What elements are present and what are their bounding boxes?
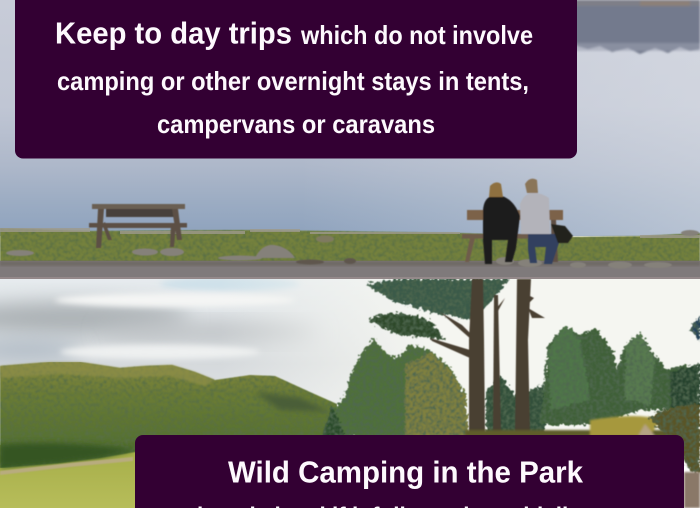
photo: hills and pine forest <box>0 277 700 508</box>
far shore reflection <box>574 0 700 54</box>
man in grey <box>520 193 550 234</box>
shoreline rocks <box>6 230 699 268</box>
backpack <box>551 224 573 243</box>
heading text: keep to day trips: Keep to day trips <box>55 16 292 50</box>
gravel path <box>0 261 700 277</box>
heading text: wild camping in the park: Wild Camping in the Park <box>228 454 584 490</box>
picnic bench: left <box>89 204 187 248</box>
woman in black <box>483 194 520 264</box>
picnic bench: right with two seated people <box>462 179 573 264</box>
hills with forest <box>0 362 337 468</box>
panel: day trips message <box>15 0 577 158</box>
undergrowth and footpath <box>465 416 700 440</box>
shrub and gravel path at right edge <box>648 405 700 508</box>
dirt track across field <box>0 457 133 475</box>
loch water <box>0 0 700 236</box>
body text: line three: campervans or caravans <box>157 109 435 139</box>
field <box>0 445 135 508</box>
body text: line two: camping or other overnight stays in tents, <box>57 66 529 96</box>
photo: loch shore with picnic benches <box>0 0 700 279</box>
sky with clouds <box>0 279 700 430</box>
grass bank <box>0 228 700 261</box>
pine canopy <box>365 279 510 340</box>
stone edge on far side of bank <box>0 228 700 238</box>
trees behind trunks: left group <box>322 338 545 438</box>
body text: line one: which do not involve <box>300 20 533 50</box>
trees on right <box>540 315 700 425</box>
pine trunks <box>430 279 545 435</box>
panel: wild camping message <box>135 435 684 508</box>
